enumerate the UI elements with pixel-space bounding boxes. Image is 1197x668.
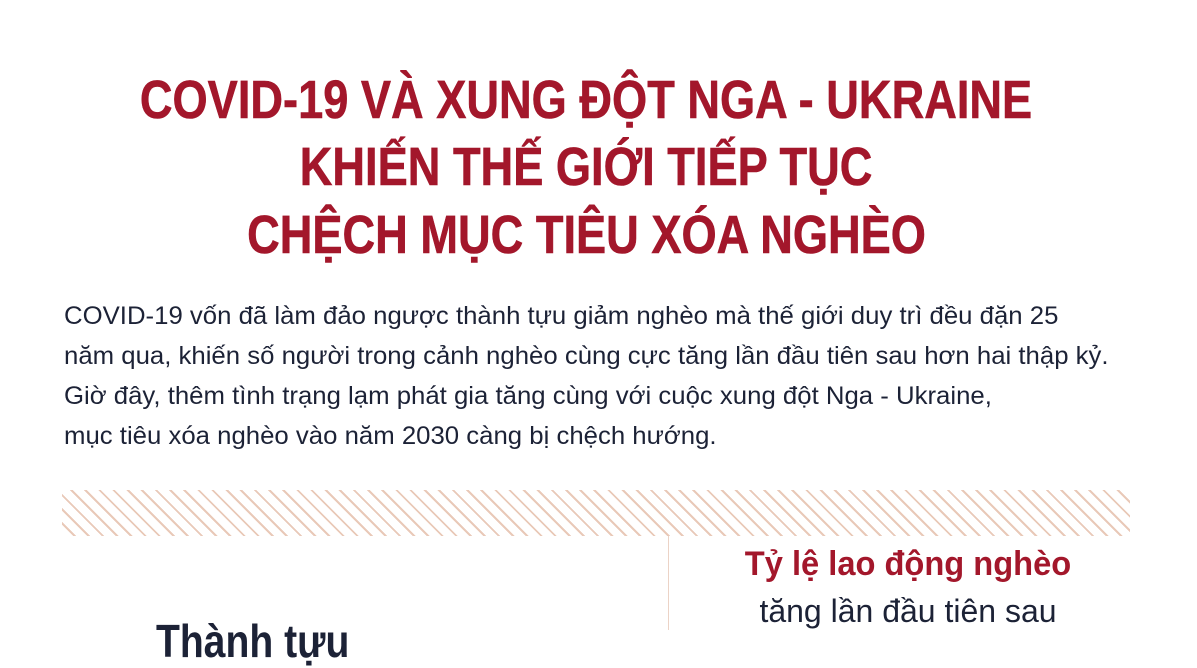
right panel heading: [745, 545, 1071, 629]
title: KHIẾN THẾ GIỚI TIẾP TỤC: [300, 137, 873, 197]
intro text: COVID-19 vốn đã làm đảo ngược thành tựu giảm nghèo mà thế giới duy trì đều đặn 25: [64, 302, 1058, 330]
intro text: [64, 302, 1109, 450]
striped band: [62, 490, 1130, 536]
title: [140, 69, 1033, 265]
intro text: năm qua, khiến số người trong cảnh nghèo cùng cực tăng lần đầu tiên sau hơn hai thập kỷ.: [64, 342, 1109, 370]
right panel heading: tăng lần đầu tiên sau: [759, 593, 1057, 629]
intro text: mục tiêu xóa nghèo vào năm 2030 càng bị chệch hướng.: [64, 422, 717, 450]
left panel heading: Thành tựu: [156, 615, 349, 667]
title: CHỆCH MỤC TIÊU XÓA NGHÈO: [247, 205, 926, 265]
right panel heading: Tỷ lệ lao động nghèo: [745, 545, 1071, 583]
divider line: [668, 536, 669, 630]
title: COVID-19 VÀ XUNG ĐỘT NGA - UKRAINE: [140, 70, 1033, 130]
intro text: Giờ đây, thêm tình trạng lạm phát gia tăng cùng với cuộc xung đột Nga - Ukraine,: [64, 382, 992, 410]
